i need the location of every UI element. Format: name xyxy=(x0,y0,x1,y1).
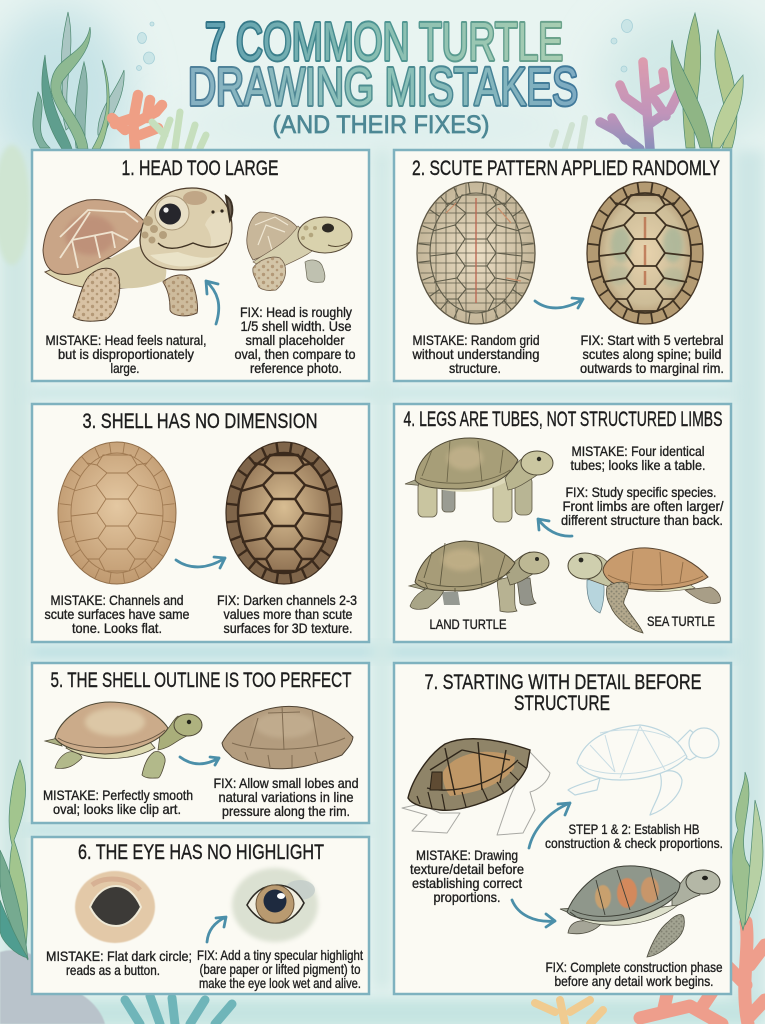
mistake text xyxy=(412,332,540,376)
fix text: natural variations in line xyxy=(218,789,354,805)
mistake text: MISTAKE: Flat dark circle; xyxy=(46,948,192,964)
top-left seaweed and coral xyxy=(33,12,206,149)
title: DRAWING MISTAKES xyxy=(188,57,578,117)
construction step text xyxy=(545,821,723,851)
top-right coral and seaweed xyxy=(552,13,743,149)
mistake text: MISTAKE: Channels and xyxy=(50,592,184,608)
fix text: FIX: Darken channels 2-3 xyxy=(217,592,357,608)
panel 2: scute pattern xyxy=(394,150,731,381)
mistake text xyxy=(410,847,524,905)
arrow: toward table turtle xyxy=(538,519,572,536)
arrow: smooth to natural xyxy=(180,757,219,765)
sea turtle label: SEA TURTLE xyxy=(647,613,715,629)
mistake text: reads as a button. xyxy=(66,962,160,978)
mistake text: without understanding xyxy=(412,346,540,362)
illustration: light construction sketch xyxy=(568,725,719,815)
mistake text: large. xyxy=(110,360,140,376)
illustration: random grid shell xyxy=(416,182,536,324)
illustration: corrected small head turtle xyxy=(247,212,352,291)
mistake text: oval; looks like clip art. xyxy=(53,801,181,817)
mistake text xyxy=(46,948,192,978)
fix text: outwards to marginal rim. xyxy=(580,360,724,376)
arrow: to construction step xyxy=(529,803,570,848)
bubbles xyxy=(136,20,632,72)
fix text xyxy=(197,947,363,991)
mistake text: but is disproportionately xyxy=(58,346,194,362)
arrow: flat to highlighted xyxy=(207,917,226,942)
fix text: FIX: Complete construction phase xyxy=(546,959,723,975)
fix text: values more than scute xyxy=(224,606,353,622)
panel 5: shell outline xyxy=(32,663,369,823)
fix text xyxy=(580,332,724,376)
fix text: oval, then compare to xyxy=(234,346,356,362)
mistake text: MISTAKE: Random grid xyxy=(412,332,540,348)
heading 1: 1. HEAD TOO LARGE xyxy=(122,157,278,180)
heading 7 xyxy=(424,671,702,715)
fix text: before any detail work begins. xyxy=(554,973,714,989)
mistake text: MISTAKE: Perfectly smooth xyxy=(43,787,193,803)
fix text: (bare paper or lifted pigment) to xyxy=(200,961,361,977)
illustration: flat dark eye xyxy=(75,871,155,943)
mistake text xyxy=(44,592,190,636)
fix text: reference photo. xyxy=(250,360,342,376)
mistake text xyxy=(46,332,206,376)
fix text xyxy=(214,775,358,819)
illustration: shell with dark channels xyxy=(226,442,342,584)
illustration: sea turtle xyxy=(568,548,721,633)
illustration: detailed shell on weak outline xyxy=(402,739,550,835)
mistake text: MISTAKE: Drawing xyxy=(416,847,518,863)
panel 1: head too large xyxy=(32,150,369,381)
fix text: 1/5 shell width. Use xyxy=(240,318,352,334)
illustration: land turtle xyxy=(409,541,549,612)
mistake text: establishing correct xyxy=(412,875,522,891)
mistake text: tone. Looks flat. xyxy=(72,620,162,636)
panel 3: shell dimension xyxy=(32,404,369,642)
fix text: make the eye look wet and alive. xyxy=(199,975,361,991)
construction step text: construction & check proportions. xyxy=(545,835,723,851)
mistake text: MISTAKE: Head feels natural, xyxy=(46,332,206,348)
arrow: random to correct xyxy=(535,298,583,308)
fix text: Front limbs are often larger/ xyxy=(562,498,724,514)
fix text: FIX: Head is roughly xyxy=(240,304,352,320)
illustration: natural rim shell xyxy=(222,706,353,769)
construction step text: STEP 1 & 2: Establish HB xyxy=(568,821,700,837)
fix text xyxy=(234,304,356,376)
illustration: flat shell xyxy=(58,442,176,584)
mistake text: proportions. xyxy=(434,889,500,905)
title xyxy=(188,12,578,139)
illustration: eye with highlight xyxy=(232,868,318,942)
fix text: scutes along spine; build xyxy=(582,346,722,362)
panel 4: legs are tubes xyxy=(394,404,731,642)
land turtle label: LAND TURTLE xyxy=(430,616,506,632)
bottom coral xyxy=(125,922,765,1024)
mistake text: texture/detail before xyxy=(410,861,524,877)
panel 7: detail before structure xyxy=(394,663,731,994)
fix text: pressure along the rim. xyxy=(222,803,350,819)
title: 7 COMMON TURTLE xyxy=(205,12,563,72)
fix text xyxy=(217,592,357,636)
mistake text xyxy=(43,787,193,817)
heading 6: 6. THE EYE HAS NO HIGHLIGHT xyxy=(78,841,324,864)
fix text: different structure than back. xyxy=(561,512,723,528)
title: (AND THEIR FIXES) xyxy=(272,111,490,139)
arrow: to finished turtle xyxy=(512,900,555,927)
heading 7: STRUCTURE xyxy=(514,692,610,715)
panel 6: eye highlight xyxy=(32,837,369,994)
illustration: finished turtle xyxy=(560,866,720,957)
mistake text: MISTAKE: Four identical xyxy=(572,443,704,459)
fix text: surfaces for 3D texture. xyxy=(224,620,352,636)
illustration: turtle with oversized head xyxy=(43,188,232,321)
mistake text: scute surfaces have same xyxy=(44,606,190,622)
illustration: smooth oval turtle xyxy=(45,702,202,778)
fix text: FIX: Allow small lobes and xyxy=(214,775,358,791)
mistake text xyxy=(570,443,706,473)
fix text: FIX: Add a tiny specular highlight xyxy=(197,947,363,963)
fix text: small placeholder xyxy=(246,332,345,348)
arrow: fix to mistake xyxy=(206,281,219,324)
mistake text: tubes; looks like a table. xyxy=(570,457,706,473)
fix text: FIX: Start with 5 vertebral xyxy=(580,332,724,348)
illustration: correct scutes shell xyxy=(587,182,703,324)
illustration: tube-legged turtle xyxy=(405,438,553,522)
fix text xyxy=(546,959,723,989)
arrow: flat to dimensional xyxy=(176,557,225,568)
heading 5: 5. THE SHELL OUTLINE IS TOO PERFECT xyxy=(50,669,352,692)
bottom-left seaweed and rock xyxy=(0,760,105,1024)
fix text xyxy=(561,484,724,528)
fix text: FIX: Study specific species. xyxy=(566,484,716,500)
heading 3: 3. SHELL HAS NO DIMENSION xyxy=(82,410,318,433)
mistake text: structure. xyxy=(449,360,501,376)
bottom-right seaweed xyxy=(732,772,763,930)
